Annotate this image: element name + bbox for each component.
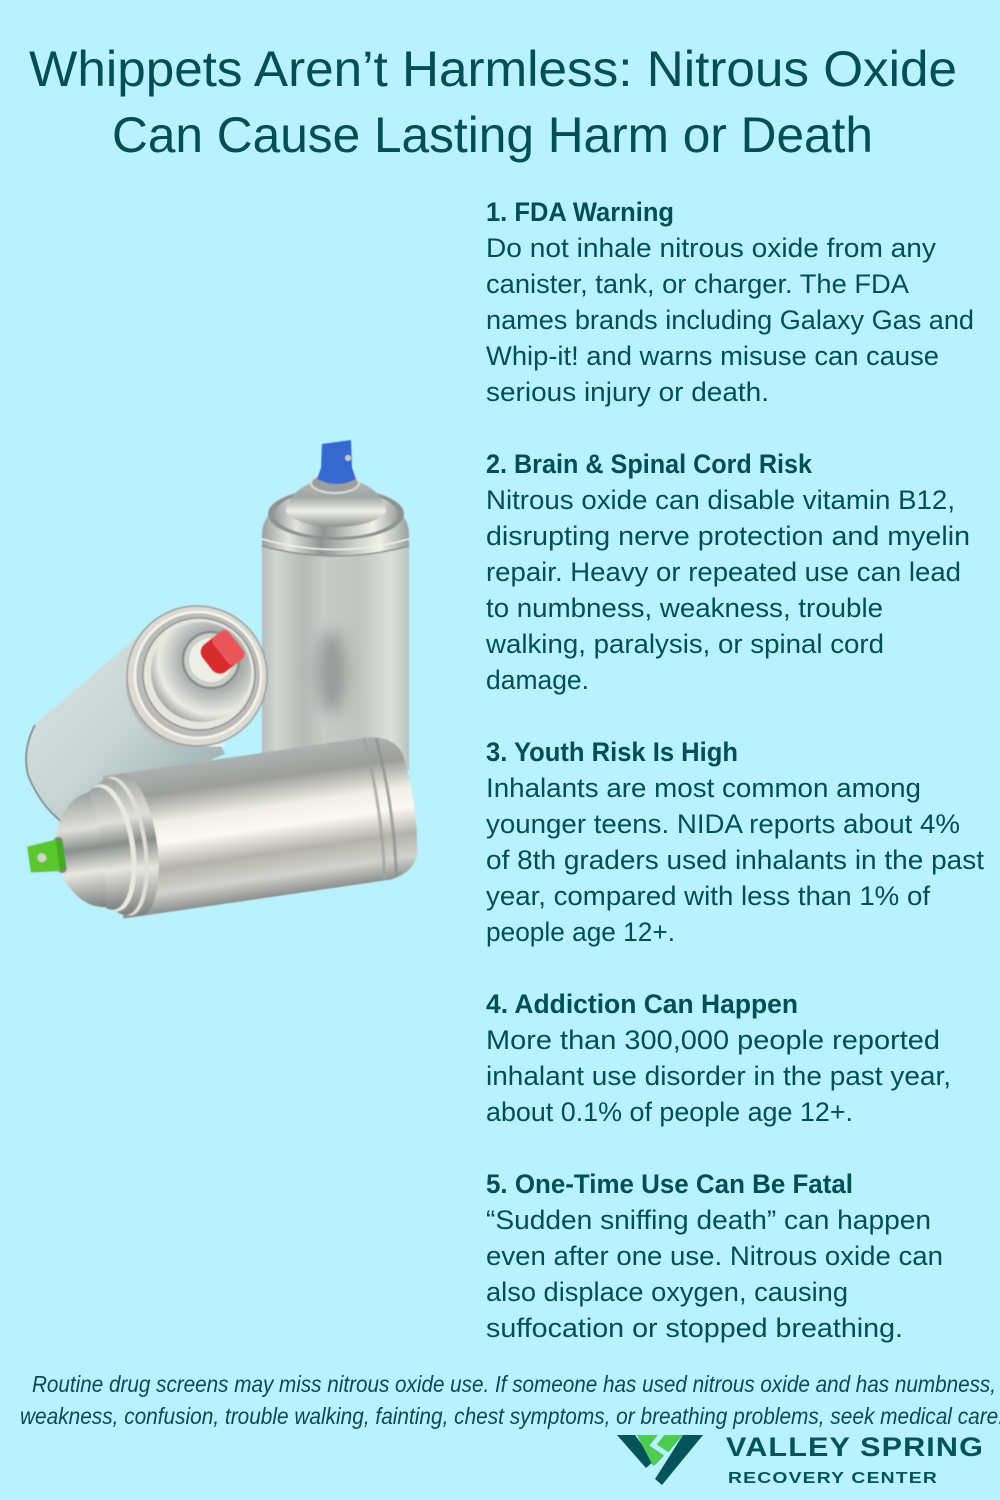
point 1: FDA warning: canister, tank, or charger. The FDA: [486, 269, 909, 299]
point 2: brain and spinal cord risk: [485, 449, 970, 695]
point 5: one-time use can be fatal: 5. One-Time Use Can Be Fatal: [486, 1169, 853, 1199]
point 1: FDA warning: serious injury or death.: [486, 377, 769, 407]
point 3: youth risk: younger teens. NIDA reports about 4%: [486, 809, 960, 839]
point 3: youth risk: people age 12+.: [486, 917, 675, 947]
point 1: FDA warning: Whip-it! and warns misuse can cause: [486, 341, 939, 371]
point 2: brain and spinal cord risk: Nitrous oxide can disable vitamin B12,: [486, 485, 955, 515]
logo mark: [617, 1434, 703, 1485]
point 5: one-time use can be fatal: [486, 1169, 943, 1343]
illustration: three aerosol cans: [19, 440, 424, 931]
point 1: FDA warning: [486, 197, 974, 407]
point 4: addiction: inhalant use disorder in the past year,: [486, 1061, 951, 1091]
logo wordmark: [726, 1432, 984, 1487]
title: [29, 41, 957, 163]
point 4: addiction: about 0.1% of people age 12+.: [486, 1097, 853, 1127]
point 4: addiction: [486, 989, 951, 1127]
point 4: addiction: More than 300,000 people reported: [486, 1025, 940, 1055]
point 2: brain and spinal cord risk: walking, paralysis, or spinal cord: [485, 629, 884, 659]
title: Can Cause Lasting Harm or Death: [112, 107, 873, 163]
point 3: youth risk: 3. Youth Risk Is High: [486, 737, 738, 767]
point 2: brain and spinal cord risk: disrupting nerve protection and myelin: [486, 521, 970, 551]
logo wordmark: VALLEY SPRING: [726, 1432, 984, 1462]
point 5: one-time use can be fatal: even after one use. Nitrous oxide can: [486, 1241, 943, 1271]
can with green nozzle: [19, 732, 424, 931]
logo wordmark: RECOVERY CENTER: [728, 1470, 938, 1487]
point 4: addiction: 4. Addiction Can Happen: [486, 989, 798, 1019]
point 3: youth risk: [486, 737, 985, 947]
point 2: brain and spinal cord risk: 2. Brain & Spinal Cord Risk: [486, 449, 813, 479]
can with blue nozzle: [262, 440, 409, 770]
footer note: [20, 1371, 1000, 1429]
point 1: FDA warning: Do not inhale nitrous oxide from any: [486, 233, 937, 263]
point 1: FDA warning: 1. FDA Warning: [486, 197, 674, 227]
point 5: one-time use can be fatal: also displace oxygen, causing: [486, 1277, 848, 1307]
point 3: youth risk: year, compared with less than 1% of: [486, 881, 931, 911]
point 3: youth risk: Inhalants are most common among: [486, 773, 921, 803]
point 5: one-time use can be fatal: suffocation or stopped breathing.: [486, 1313, 903, 1343]
logo: Valley Spring Recovery Center: [617, 1432, 984, 1487]
title: Whippets Aren’t Harmless: Nitrous Oxide: [29, 41, 957, 97]
point 2: brain and spinal cord risk: repair. Heavy or repeated use can lead: [486, 557, 961, 587]
point 2: brain and spinal cord risk: to numbness, weakness, trouble: [486, 593, 883, 623]
point 1: FDA warning: names brands including Galaxy Gas and: [486, 305, 974, 335]
point 5: one-time use can be fatal: “Sudden sniffing death” can happen: [486, 1205, 931, 1235]
can with red nozzle: [26, 606, 267, 822]
point 2: brain and spinal cord risk: damage.: [486, 665, 589, 695]
point 3: youth risk: of 8th graders used inhalants in the past: [486, 845, 985, 875]
